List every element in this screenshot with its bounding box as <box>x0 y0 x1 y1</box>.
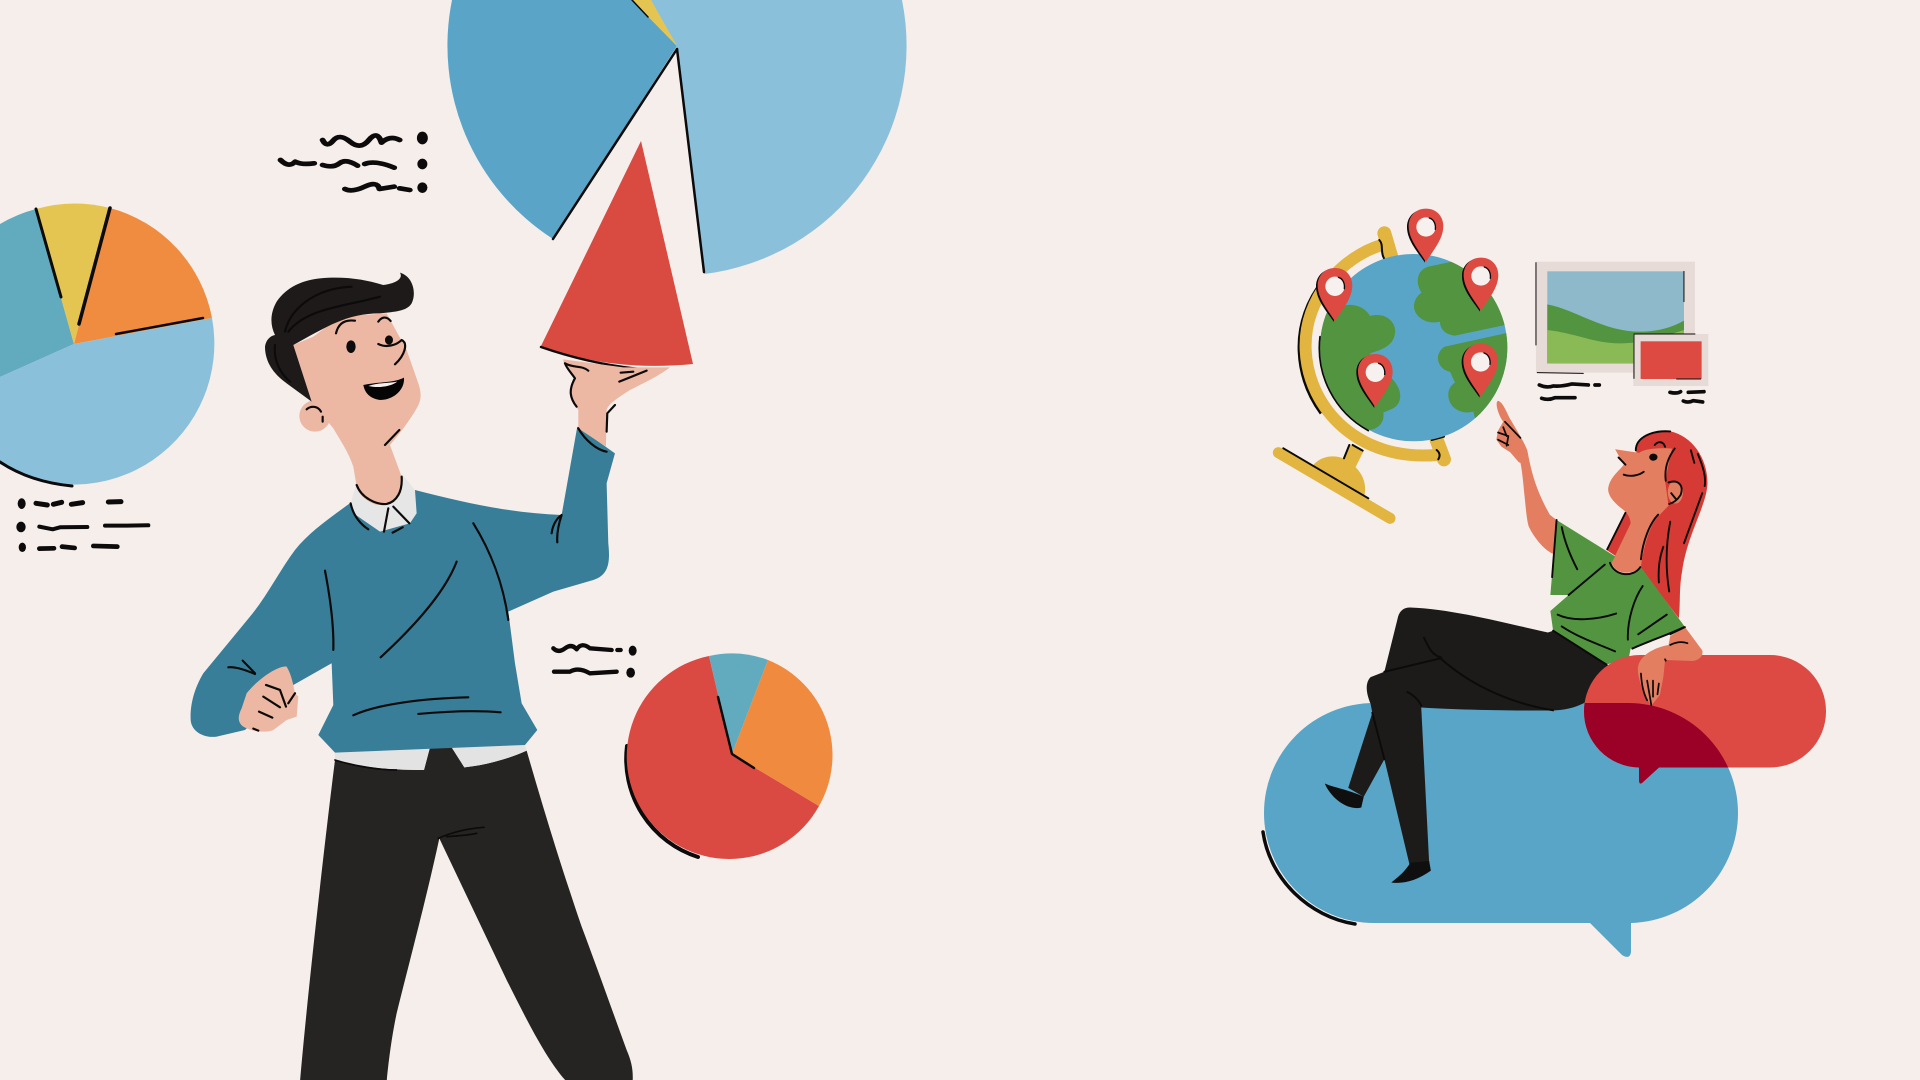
map pin 5 <box>1462 344 1498 398</box>
slice: teal <box>0 209 74 377</box>
large pie chart, top centre <box>447 0 907 274</box>
slice: red <box>627 656 819 859</box>
slice: light blue <box>651 0 907 274</box>
trousers and shirt hem <box>300 745 633 1080</box>
slice: orange <box>732 660 832 806</box>
neck and face <box>293 313 421 505</box>
globe <box>1320 254 1507 441</box>
ear <box>299 400 331 432</box>
map pin 4 <box>1356 354 1393 408</box>
ink lines: face, hair, shirt and legs <box>1372 431 1705 759</box>
small red picture <box>1633 334 1708 386</box>
shoe: right <box>1391 861 1431 883</box>
scribble text, top <box>281 132 428 193</box>
scribble text, picture captions <box>1539 384 1704 402</box>
left pie chart <box>0 204 214 486</box>
woman figure <box>1325 401 1707 883</box>
continents <box>1317 260 1513 430</box>
framed landscape picture <box>1536 262 1695 373</box>
shoe: left <box>1325 784 1364 808</box>
raised hand <box>563 359 670 447</box>
slice: yellow <box>36 204 110 344</box>
slice: dark blue <box>447 0 677 239</box>
slice: light blue <box>0 318 214 485</box>
speech bubble: red <box>1584 655 1826 784</box>
slice: teal <box>709 653 768 754</box>
speech bubble: blue <box>1264 703 1738 957</box>
man figure <box>191 273 670 1080</box>
shirt collar <box>351 475 417 532</box>
green t-shirt <box>1550 520 1685 665</box>
face and neck <box>1608 448 1672 573</box>
woman's resting arm and hand <box>1638 627 1703 706</box>
map pin 2 <box>1316 268 1352 322</box>
arm and pointing hand <box>1496 401 1557 554</box>
small pie chart <box>626 653 832 859</box>
map pin 1 <box>1407 209 1443 263</box>
eyes <box>346 340 356 353</box>
ear <box>1668 481 1683 504</box>
scribble text, left <box>16 498 148 552</box>
map pin 3 <box>1462 258 1498 312</box>
globe stand <box>1278 233 1444 518</box>
fist <box>239 666 298 732</box>
speech bubble overlap <box>1584 703 1728 784</box>
scribble text, small pie <box>553 645 637 678</box>
globe illustration <box>1278 209 1708 518</box>
hair <box>1607 431 1707 618</box>
ink lines: face, sweater and hands <box>228 287 647 731</box>
trousers <box>1348 607 1610 865</box>
slice: yellow <box>632 0 677 46</box>
mouth <box>363 378 404 400</box>
sweater <box>191 427 615 753</box>
hair <box>265 273 414 402</box>
slice: orange <box>74 208 212 344</box>
detached red pie slice <box>541 141 693 369</box>
